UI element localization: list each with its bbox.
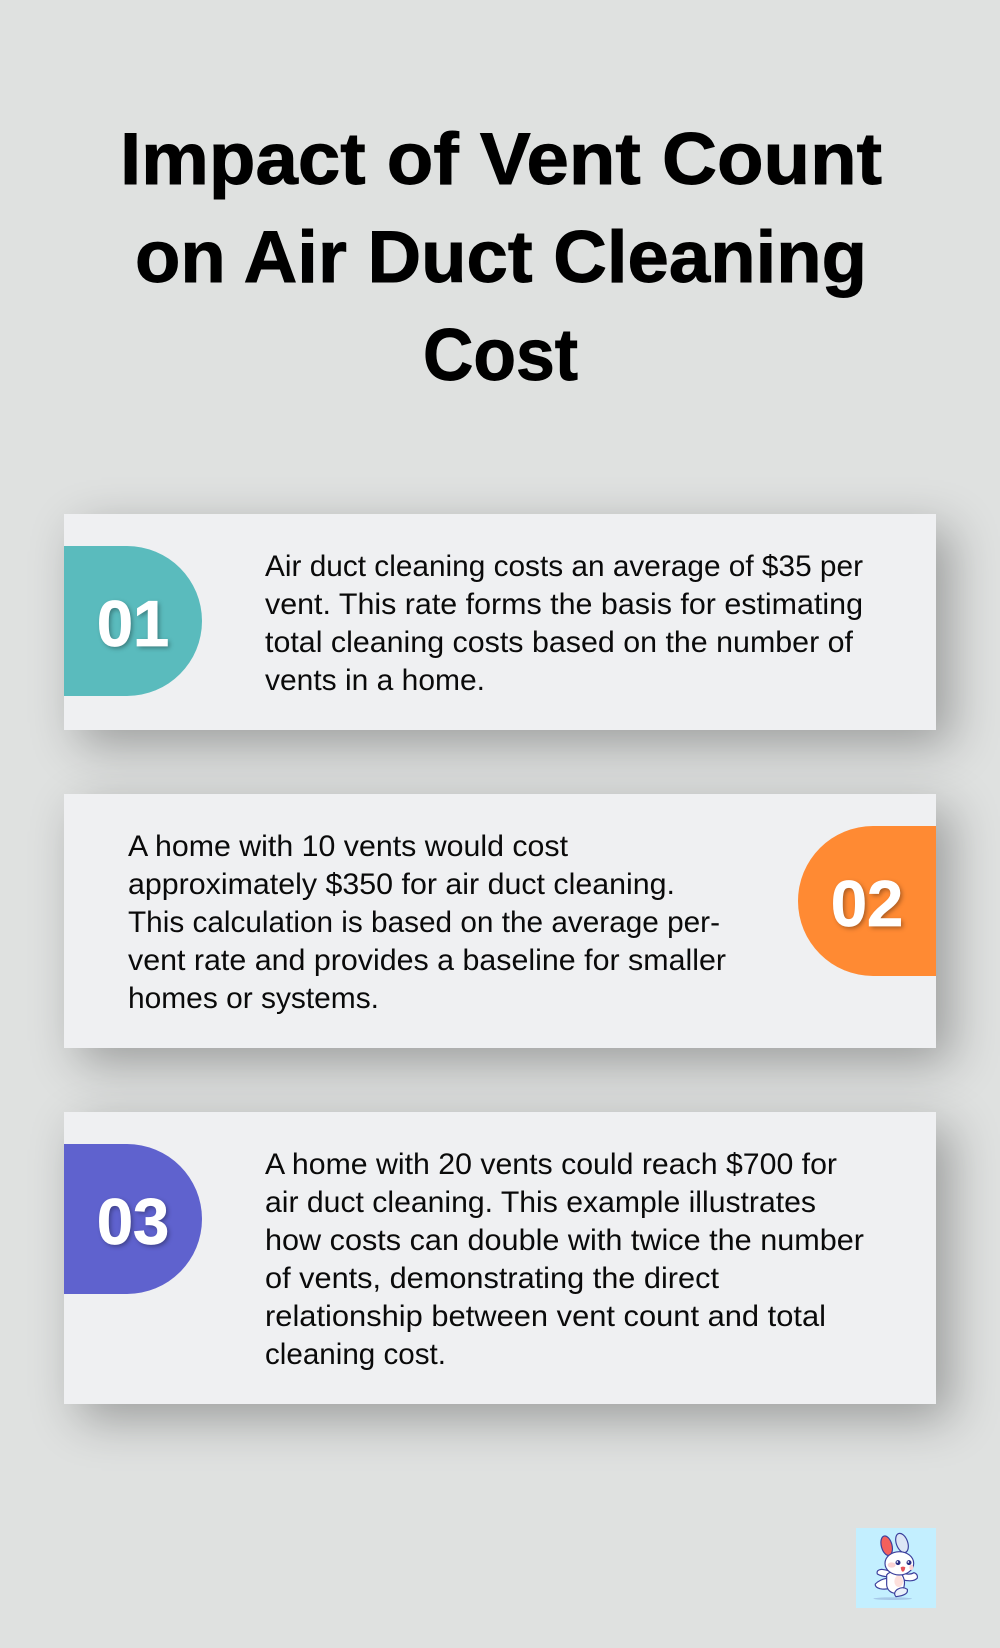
text: step 02 description: homes or systems. [128,982,379,1015]
title: Impact of Vent Count [120,119,882,200]
text: step 01 description: total cleaning costs based on the number of [265,626,854,659]
text: step 03 description [265,1148,864,1371]
text: step 01 description: Air duct cleaning costs an average of $35 per [265,550,863,583]
text: step 03 description: A home with 20 vents could reach $700 for [265,1148,837,1181]
text: step 01 description: vents in a home. [265,664,485,697]
title [120,119,882,396]
panel: step 01 [64,514,936,730]
title: on Air Duct Cleaning [135,217,867,298]
text: step 02 description: This calculation is based on the average per- [128,906,720,939]
text: step 03 description: air duct cleaning. This example illustrates [265,1186,816,1219]
text: step 02 description: vent rate and provides a baseline for smaller [128,944,726,977]
badge: 02 [798,826,936,976]
text: step 02 description: A home with 10 vents would cost [128,830,568,863]
text: step 02 description [128,830,726,1015]
text: step 02 description: approximately $350 for air duct cleaning. [128,868,675,901]
text: step 03 description: how costs can double with twice the number [265,1224,864,1257]
text: step 03 description: relationship between vent count and total [265,1300,826,1333]
badge: 01: 01 [97,587,169,660]
badge: 03: 03 [97,1185,169,1258]
badge: 01 [64,546,202,696]
panel: step 02 [64,794,936,1048]
title: Cost [423,315,578,396]
text: step 01 description: vent. This rate forms the basis for estimating [265,588,863,621]
panel: step 03 [64,1112,936,1404]
text: step 03 description: of vents, demonstrating the direct [265,1262,719,1295]
badge: 02: 02 [831,867,903,940]
text: step 01 description [265,550,863,697]
badge: 03 [64,1144,202,1294]
icon: running rabbit logo [856,1528,936,1608]
text: step 03 description: cleaning cost. [265,1338,446,1371]
